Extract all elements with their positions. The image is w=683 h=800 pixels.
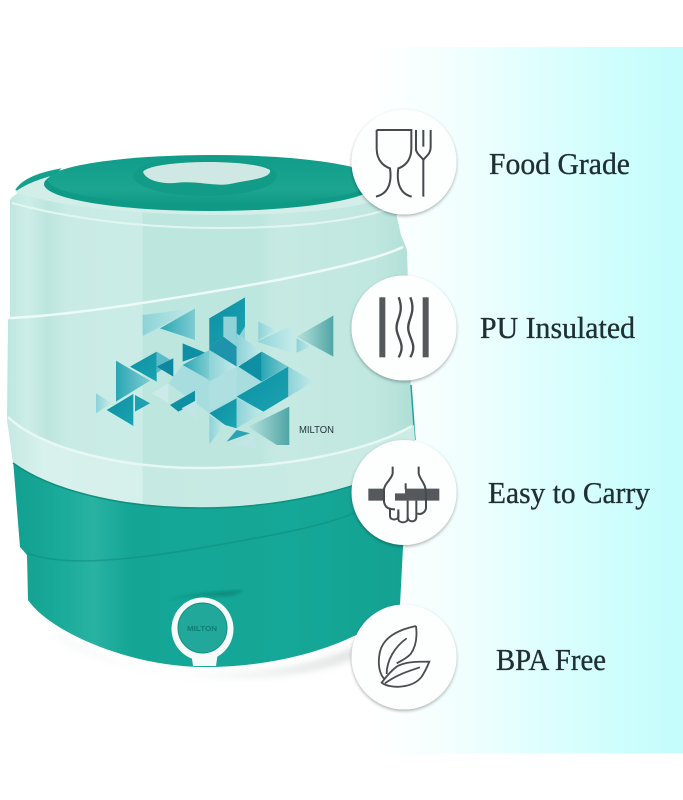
label: PU Insulated <box>480 310 635 345</box>
icon: glass and fork <box>376 130 431 197</box>
tap logo: MILTON <box>187 626 217 633</box>
water jar product <box>7 155 415 677</box>
icon circle <box>352 604 456 710</box>
lid raised collar <box>133 156 277 196</box>
jar ground shadow <box>50 630 360 677</box>
label: BPA Free <box>496 642 606 677</box>
tap <box>172 598 234 666</box>
icon circle <box>352 276 456 380</box>
tap white ring <box>172 598 234 660</box>
lower rim band <box>7 417 415 508</box>
geometric fish pattern <box>96 297 333 448</box>
jar lid <box>15 155 392 215</box>
lid pale top <box>15 155 392 215</box>
tap stem <box>191 652 218 666</box>
gradient background panel <box>340 47 683 753</box>
label: Easy to Carry <box>488 475 650 510</box>
feature: food grade <box>352 110 630 214</box>
MILTON logo on body: MILTON <box>299 424 334 436</box>
icon: insulation layers <box>379 297 429 357</box>
icon: hands on handle <box>368 467 439 522</box>
jar right edge line <box>411 385 415 440</box>
lid centre cap <box>143 162 270 185</box>
feature: easy to carry <box>352 440 650 545</box>
jar pale body <box>7 167 415 508</box>
icon circle <box>352 440 456 545</box>
lid handle tab <box>15 168 62 192</box>
icon: leaves <box>379 626 429 687</box>
tap recess <box>168 590 243 600</box>
icon circle <box>352 110 456 214</box>
tap teal button <box>178 603 227 653</box>
rim highlights <box>8 417 412 468</box>
feature: PU insulated <box>352 276 635 380</box>
base groove <box>27 512 356 561</box>
jar teal base <box>13 460 413 667</box>
label: Food Grade <box>489 146 630 181</box>
lid teal dish <box>44 157 376 211</box>
feature: BPA free <box>352 604 606 710</box>
